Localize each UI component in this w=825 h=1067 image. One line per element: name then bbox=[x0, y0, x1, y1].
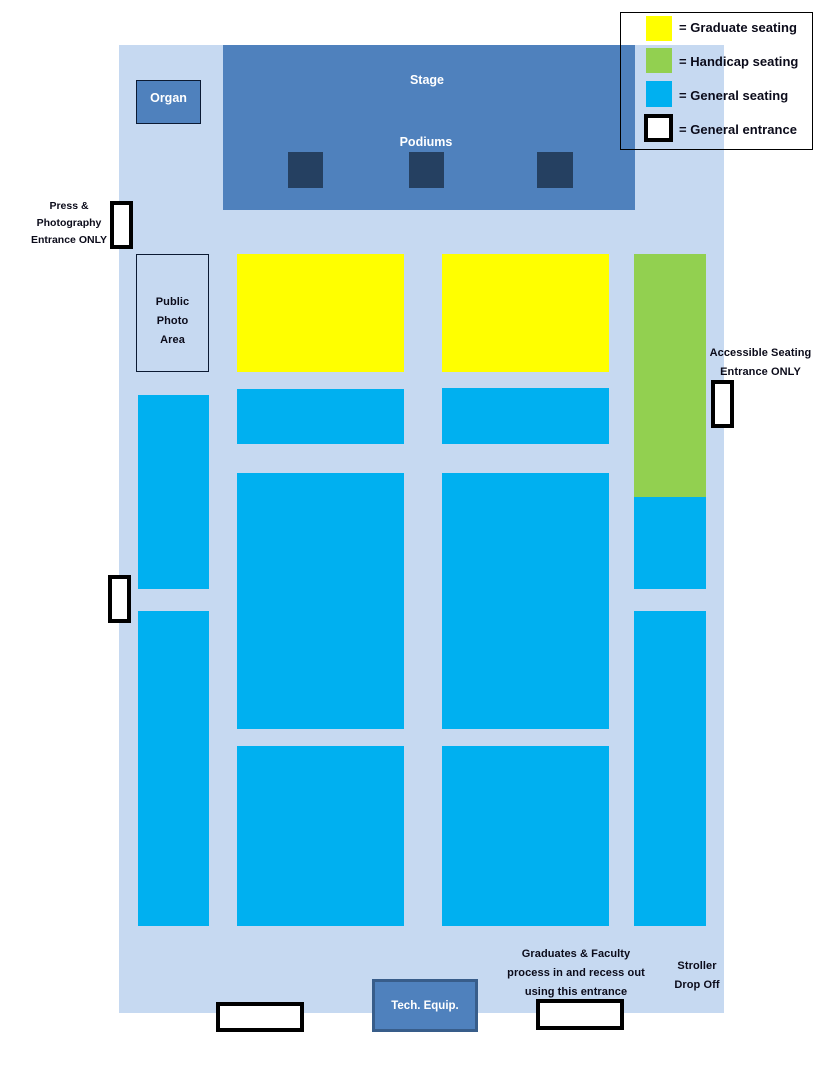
text: graduates and faculty entrance label: using this entrance bbox=[525, 986, 627, 998]
panel: stage bbox=[223, 45, 635, 210]
panel: public photo area: Area bbox=[160, 334, 185, 346]
panel: graduate seating right bbox=[442, 254, 609, 372]
icon: graduate swatch bbox=[646, 16, 672, 41]
icon: podium center bbox=[409, 152, 444, 188]
icon: bottom left entrance bbox=[216, 1002, 304, 1032]
panel: general seating center-left row 1 bbox=[237, 389, 404, 444]
text: stroller drop off bbox=[674, 960, 720, 991]
panel: general seating center-left row 3 bbox=[237, 746, 404, 926]
text: general entrance legend: = General entrance bbox=[679, 122, 797, 137]
icon: podium right bbox=[537, 152, 573, 188]
icon: press entrance bbox=[110, 201, 133, 249]
text: accessible entrance label: Entrance ONLY bbox=[720, 366, 801, 378]
panel: general seating center-right row 2 bbox=[442, 473, 609, 729]
icon: accessible entrance bbox=[711, 380, 734, 428]
text: accessible entrance label bbox=[710, 347, 811, 378]
panel: public photo area: Photo bbox=[157, 315, 188, 327]
text: stroller drop off: Stroller bbox=[677, 960, 717, 972]
panel: legend bbox=[620, 12, 813, 150]
panel: organ: Organ bbox=[150, 91, 187, 105]
text: press entrance label bbox=[31, 200, 107, 246]
text: handicap legend: = Handicap seating bbox=[679, 54, 798, 69]
panel: general seating center-left row 2 bbox=[237, 473, 404, 729]
text: accessible entrance label: Accessible Seating bbox=[710, 347, 811, 359]
panel: general seating left lower bbox=[138, 611, 209, 926]
text: general seating legend: = General seating bbox=[679, 88, 788, 103]
icon: general entrance swatch bbox=[644, 114, 673, 142]
text: graduate legend: = Graduate seating bbox=[679, 20, 797, 35]
icon: left general entrance bbox=[108, 575, 131, 623]
panel: graduate seating left bbox=[237, 254, 404, 372]
heading: stage label: Stage bbox=[410, 73, 444, 87]
icon: podium left bbox=[288, 152, 323, 188]
panel: technical equipment: Tech. Equip. bbox=[391, 1000, 459, 1012]
text: stroller drop off: Drop Off bbox=[674, 979, 720, 991]
text: press entrance label: Press & bbox=[49, 200, 89, 212]
panel: handicap seating bbox=[634, 254, 706, 497]
panel: technical equipment bbox=[372, 979, 478, 1032]
panel: public photo area: Public bbox=[156, 296, 189, 308]
panel: organ bbox=[136, 80, 201, 124]
heading: podiums label: Podiums bbox=[400, 135, 452, 149]
icon: general seating swatch bbox=[646, 81, 672, 107]
text: graduates and faculty entrance label bbox=[507, 948, 645, 998]
panel: general seating right lower bbox=[634, 611, 706, 926]
icon: graduates entrance bbox=[536, 999, 624, 1030]
panel: general seating right upper bbox=[634, 497, 706, 589]
text: graduates and faculty entrance label: Graduates & Faculty bbox=[522, 948, 630, 960]
text: graduates and faculty entrance label: process in and recess out bbox=[507, 967, 645, 979]
text: press entrance label: Entrance ONLY bbox=[31, 234, 107, 246]
panel: general seating center-right row 3 bbox=[442, 746, 609, 926]
panel: hall floor bbox=[119, 45, 724, 1013]
text: press entrance label: Photography bbox=[37, 217, 101, 229]
panel: general seating left upper bbox=[138, 395, 209, 589]
icon: handicap swatch bbox=[646, 48, 672, 73]
panel: public photo area bbox=[136, 254, 209, 372]
panel: general seating center-right row 1 bbox=[442, 388, 609, 444]
